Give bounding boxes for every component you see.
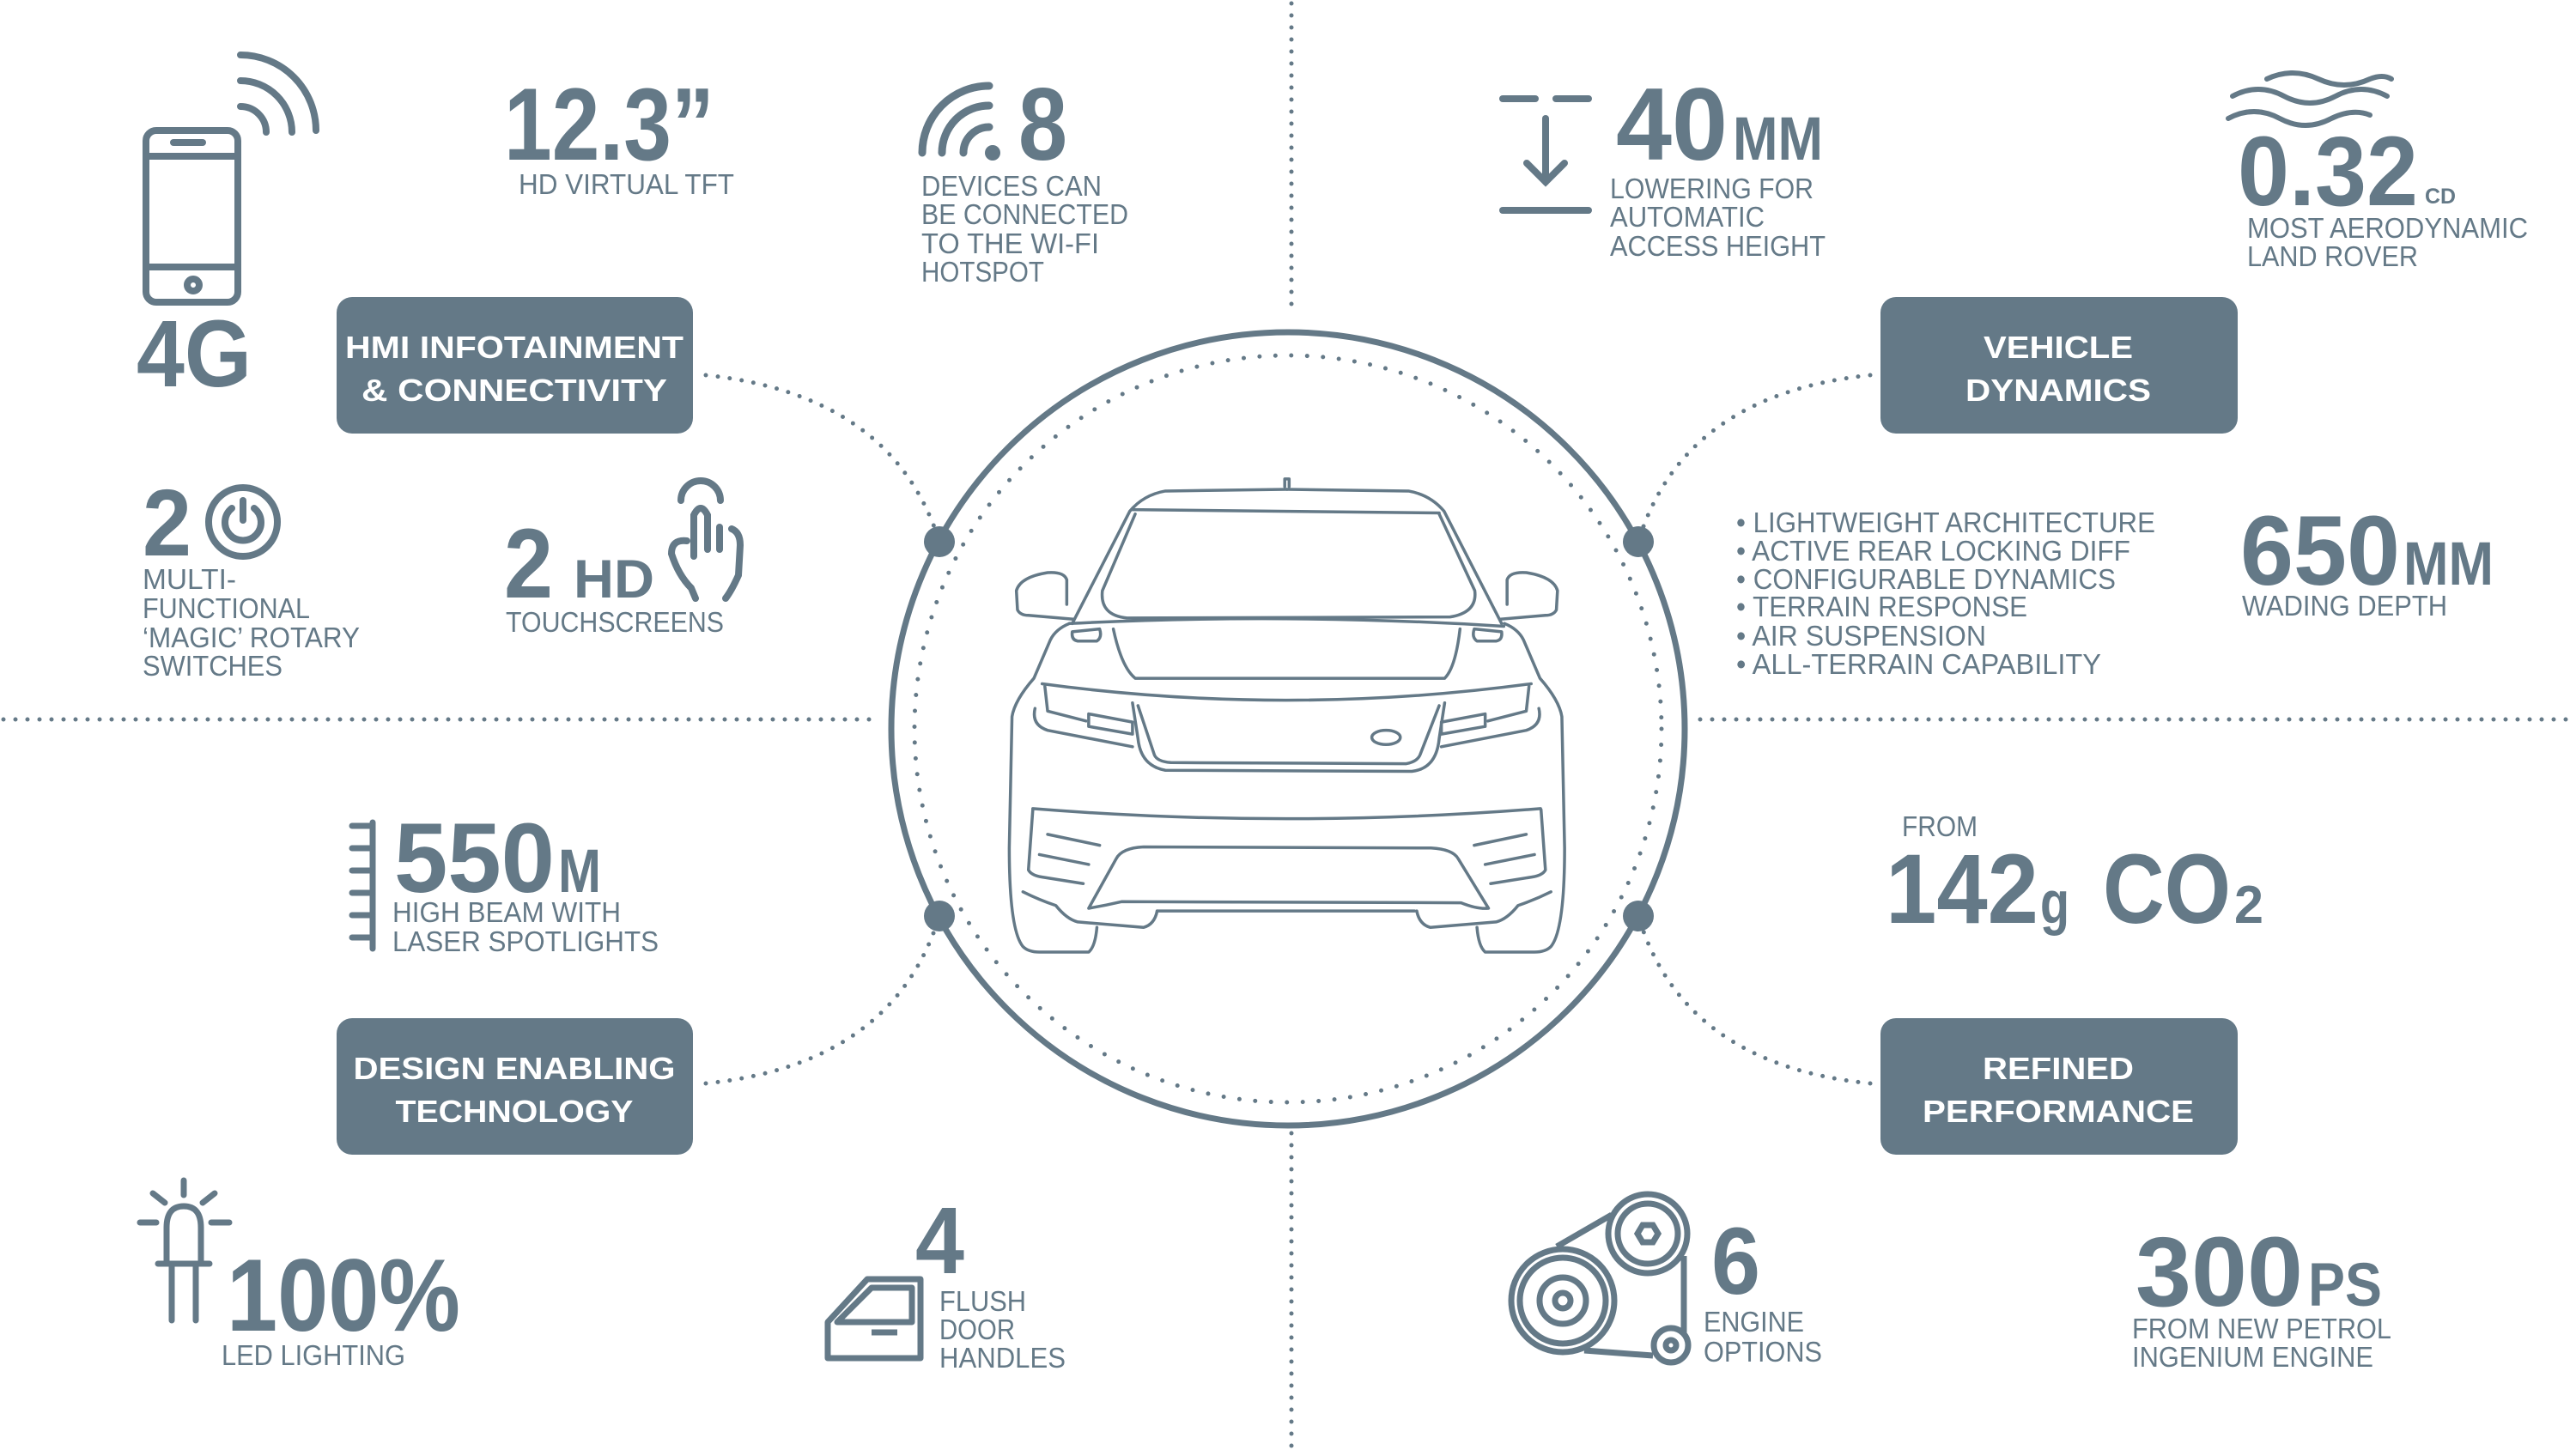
stat: 650mm wading: MM [2403,531,2494,598]
stat: 550m high beam: M [558,838,601,906]
connector: design [706,916,939,1083]
car illustration [1009,479,1564,952]
panel: design enabling technology [140,804,1066,1374]
stat: 142g CO2: g [2040,869,2069,936]
stat: 142g CO2: FROM [1902,810,1978,842]
heading box: design: DESIGN ENABLING [354,1051,675,1086]
stat: 550m high beam [352,804,659,957]
bullet list: • TERRAIN RESPONSE [1736,591,2027,622]
stat: 8 devices: 8 [1018,67,1067,182]
stat: 0.32 Cd: CD [2425,185,2456,209]
stat: 2 rotary switches: ‘MAGIC’ ROTARY [143,622,360,653]
stat: 8 devices: HOTSPOT [921,256,1044,288]
stat: 300PS: INGENIUM ENGINE [2132,1341,2373,1373]
bullet list: • LIGHTWEIGHT ARCHITECTURE [1736,507,2155,538]
stat: 8 devices: BE CONNECTED [921,198,1128,230]
stat: 2 rotary switches [143,470,360,682]
stat: 40mm lowering: 40 [1616,67,1728,182]
stat: 4G: 4G [137,301,252,407]
stat: 40mm lowering [1503,67,1826,262]
bullet list [1736,507,2155,680]
stat: 8 devices: TO THE WI-FI [921,228,1099,259]
stat: 650mm wading: 650 [2240,496,2400,606]
stat: 100% LED: 100% [227,1238,460,1353]
heading box: design [337,1018,693,1155]
heading box: refined performance: REFINED [1983,1051,2134,1086]
bullet list: • CONFIGURABLE DYNAMICS [1736,563,2116,595]
stat: 142g CO2: 2 [2234,876,2263,935]
stat: 2 HD touchscreens: 2 [504,509,553,619]
stat: 6 engine options: OPTIONS [1704,1336,1822,1368]
stat: 8 devices [921,67,1128,288]
stat: 40mm lowering: AUTOMATIC [1610,201,1765,233]
stat: 40mm lowering: ACCESS HEIGHT [1610,230,1826,262]
bullet list: • ALL-TERRAIN CAPABILITY [1736,648,2101,680]
stat: 100% LED [140,1180,460,1371]
stat: 550m high beam: LASER SPOTLIGHTS [392,925,659,957]
heading box: vehicle dynamics: VEHICLE [1984,330,2133,365]
panel: refined performance [1511,810,2391,1373]
stat: 40mm lowering: LOWERING FOR [1610,173,1814,204]
stat: 4 flush door handles: DOOR [939,1313,1015,1345]
stat: 4 flush door handles: HANDLES [939,1342,1066,1374]
stat: 6 engine options [1511,1194,1822,1368]
stat: 300PS: FROM NEW PETROL [2132,1313,2391,1344]
stat: 2 rotary switches: MULTI- [143,563,236,595]
stat: 0.32 Cd: 0.32 [2238,117,2418,227]
heading box: HMI [337,297,693,434]
central circle [891,332,1685,1125]
connector: performance [1638,916,1870,1083]
stat: 550m high beam: 550 [394,804,555,913]
heading box: refined performance [1880,1018,2238,1155]
stat: 0.32 Cd [2228,73,2528,272]
stat: 12.3 inch: HD VIRTUAL TFT [519,168,734,200]
panel: vehicle dynamics [1503,67,2528,680]
stat: 2 rotary switches: 2 [143,470,191,576]
stat: 2 HD touchscreens: HD [574,549,654,610]
stat: 142g CO2: 142 [1886,834,2038,944]
stat: 4 flush door handles: FLUSH [939,1285,1026,1317]
bullet list: • ACTIVE REAR LOCKING DIFF [1736,535,2130,567]
stat: 2 HD touchscreens: TOUCHSCREENS [506,606,724,638]
stat: 300PS: PS [2308,1252,2382,1320]
stat: 550m high beam: HIGH BEAM WITH [392,896,621,928]
heading box: vehicle dynamics: DYNAMICS [1965,373,2151,408]
stat: 2 rotary switches: SWITCHES [143,650,283,682]
connector: vehicle dynamics [1638,375,1870,542]
heading box: refined performance: PERFORMANCE [1923,1094,2194,1129]
stat: 40mm lowering: MM [1733,106,1823,173]
stat: 6 engine options: 6 [1711,1209,1760,1314]
heading box: HMI: & CONNECTIVITY [361,373,667,408]
stat: 650mm wading: WADING DEPTH [2242,590,2447,622]
stat: 0.32 Cd: LAND ROVER [2247,240,2418,272]
stat: 100% LED: LED LIGHTING [222,1339,405,1371]
stat: 142g CO2: CO [2103,834,2231,944]
stat: 2 HD touchscreens [504,481,740,638]
stat: 2 rotary switches: FUNCTIONAL [143,592,310,624]
stat: 300PS: 300 [2136,1217,2303,1327]
stat: 142g CO2 [1886,810,2263,944]
stat: 650mm wading [2240,496,2494,622]
stat: 4 flush door handles [828,1188,1066,1374]
stat: 8 devices: DEVICES CAN [921,170,1102,202]
stat: 6 engine options: ENGINE [1704,1306,1804,1338]
bullet list: • AIR SUSPENSION [1736,620,1986,652]
stat: 12.3 inch: 12.3” [504,67,714,182]
connector: HMI [706,375,939,542]
heading box: HMI: HMI INFOTAINMENT [345,330,683,365]
icon: phone with signal [146,55,316,302]
heading box: vehicle dynamics [1880,297,2238,434]
stat: 4 flush door handles: 4 [915,1188,964,1294]
panel: HMI infotainment & connectivity [137,55,1128,682]
heading box: design: TECHNOLOGY [395,1094,634,1129]
stat: 300PS [2132,1217,2391,1373]
stat: 0.32 Cd: MOST AERODYNAMIC [2247,212,2528,244]
